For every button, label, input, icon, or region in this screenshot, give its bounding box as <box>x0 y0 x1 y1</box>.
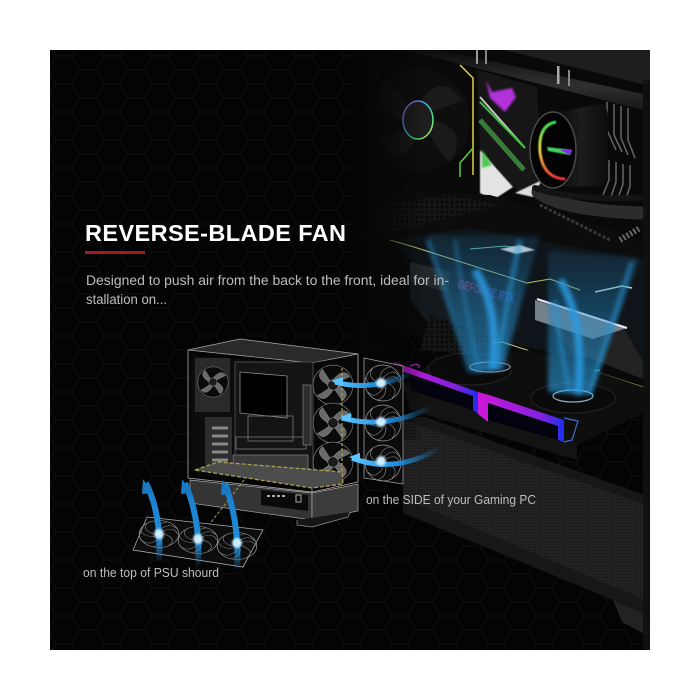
side triple fan module <box>364 358 403 484</box>
PSU shroud fan module <box>133 517 263 567</box>
motherboard tray outline <box>233 362 313 470</box>
motherboard <box>360 190 650 300</box>
side airflow arrows <box>331 373 442 466</box>
PC case line diagram <box>188 339 358 527</box>
red accent underline <box>85 251 145 254</box>
description text <box>86 273 449 307</box>
right case pillar <box>643 80 650 650</box>
case top <box>188 339 358 363</box>
liquid cooler pump <box>530 104 608 188</box>
graphics card shroud <box>392 228 645 380</box>
ROG graphics card plate <box>477 70 542 200</box>
airflow beams <box>428 235 640 395</box>
intake fan stack <box>313 365 353 482</box>
circuit lines <box>390 240 643 387</box>
title: REVERSE-BLADE FAN <box>85 220 346 246</box>
description text: stallation on... <box>86 292 167 307</box>
PSU shroud base <box>190 480 358 527</box>
PC interior <box>360 50 650 410</box>
mesh side panel <box>403 417 650 637</box>
upward airflow arrows <box>142 479 242 570</box>
CPU block <box>500 245 535 254</box>
case top frame bars <box>405 50 650 110</box>
PSU caption: on the top of PSU shourd <box>83 566 219 580</box>
side caption: on the SIDE of your Gaming PC <box>366 493 536 507</box>
RGB lines on the rear plate <box>460 65 473 177</box>
case outline <box>188 350 358 492</box>
GeForce logotype: GEFORCE RTX <box>456 276 516 306</box>
description text: Designed to push air from the back to the front, ideal for in- <box>86 273 449 288</box>
fade into background <box>355 50 425 440</box>
silver heatsink <box>535 299 627 339</box>
expansion slots <box>205 417 232 465</box>
floor with dashed yellow border <box>195 462 343 488</box>
case interior <box>191 355 312 487</box>
dashed link to PSU fans <box>205 480 244 530</box>
black background panel <box>50 50 650 650</box>
rear RGB fan <box>364 65 470 172</box>
GPU fan housing <box>403 350 643 460</box>
rear exhaust fan <box>195 358 230 412</box>
RGB light bar <box>394 362 578 442</box>
gaming PC photograph <box>355 50 650 650</box>
liquid cooler tube <box>535 188 640 213</box>
RAM modules <box>603 102 635 199</box>
